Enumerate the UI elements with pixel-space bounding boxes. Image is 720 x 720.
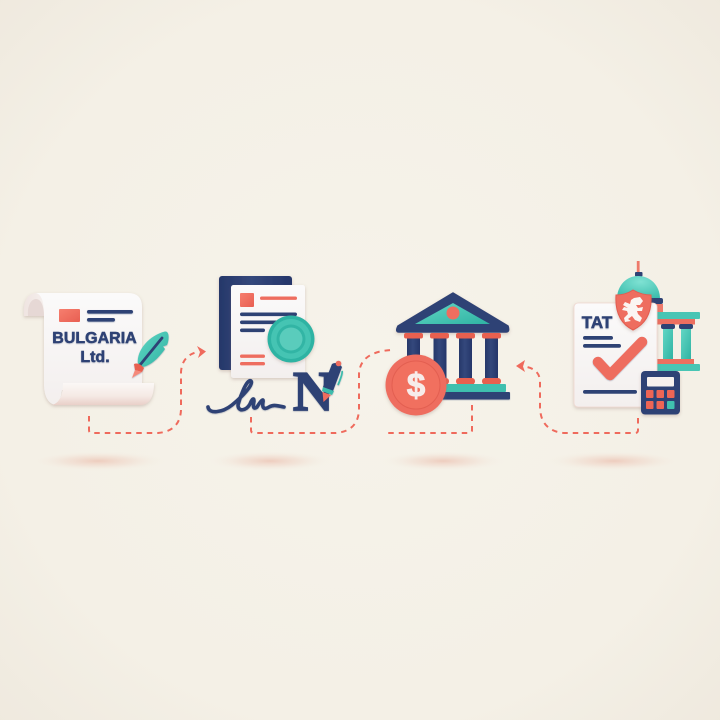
icon: government building [617, 261, 700, 371]
calculator keys [646, 390, 674, 409]
arrow: tax document to bank [516, 360, 638, 433]
company name [52, 330, 137, 366]
icon: tax document [574, 303, 657, 407]
TAT heading: TAT [582, 313, 613, 332]
navy plinth [436, 392, 510, 400]
tax sheet [574, 303, 657, 407]
teal wax seal [268, 316, 314, 362]
white front sheet [231, 285, 305, 378]
dome band [617, 298, 663, 304]
company name: BULGARIA [52, 330, 137, 347]
calculator screen [647, 377, 674, 386]
lion emblem [622, 297, 643, 322]
ground shadow: step 4 [546, 451, 682, 471]
teal tympanum [415, 303, 490, 324]
header lines [87, 310, 133, 322]
dollar coin: $ [407, 366, 425, 404]
building base [655, 359, 694, 364]
navy back sheet [219, 276, 292, 370]
notary letter N: N [293, 361, 333, 423]
red square [240, 293, 254, 307]
ground shadow: step 3 [381, 451, 505, 471]
icon: calculator [641, 371, 680, 414]
red stamp block [59, 309, 80, 322]
navy text lines [240, 312, 297, 332]
arrow: notarised document to bank [251, 350, 391, 433]
dome cap [635, 272, 642, 276]
entablature [655, 312, 700, 319]
tax text lines [583, 336, 637, 394]
icon: signature [208, 381, 284, 412]
company name: Ltd. [80, 349, 110, 366]
scroll bottom roll [52, 383, 154, 405]
building columns [661, 324, 693, 360]
ground shadow: step 2 [208, 451, 332, 471]
icon: notary pen [322, 361, 342, 402]
icon: notarised document [219, 276, 314, 378]
icon: lion shield [616, 290, 651, 330]
ground shadow: step 1 [30, 451, 166, 471]
teal step [436, 384, 506, 392]
icon: bank building [386, 293, 510, 416]
icon: quill [132, 331, 169, 378]
check mark [598, 342, 642, 375]
red title line [260, 296, 297, 300]
pediment medallion [446, 306, 460, 320]
bank pediment [397, 293, 509, 332]
icon: company scroll [24, 293, 154, 405]
arrow: scroll to notarised document [89, 346, 206, 433]
arrow: bank connector [384, 405, 472, 433]
bank columns [404, 333, 501, 384]
red text lines [240, 354, 265, 365]
scroll top curl [24, 293, 60, 316]
spire [637, 261, 640, 273]
dome [617, 276, 660, 299]
scroll page [36, 293, 142, 405]
